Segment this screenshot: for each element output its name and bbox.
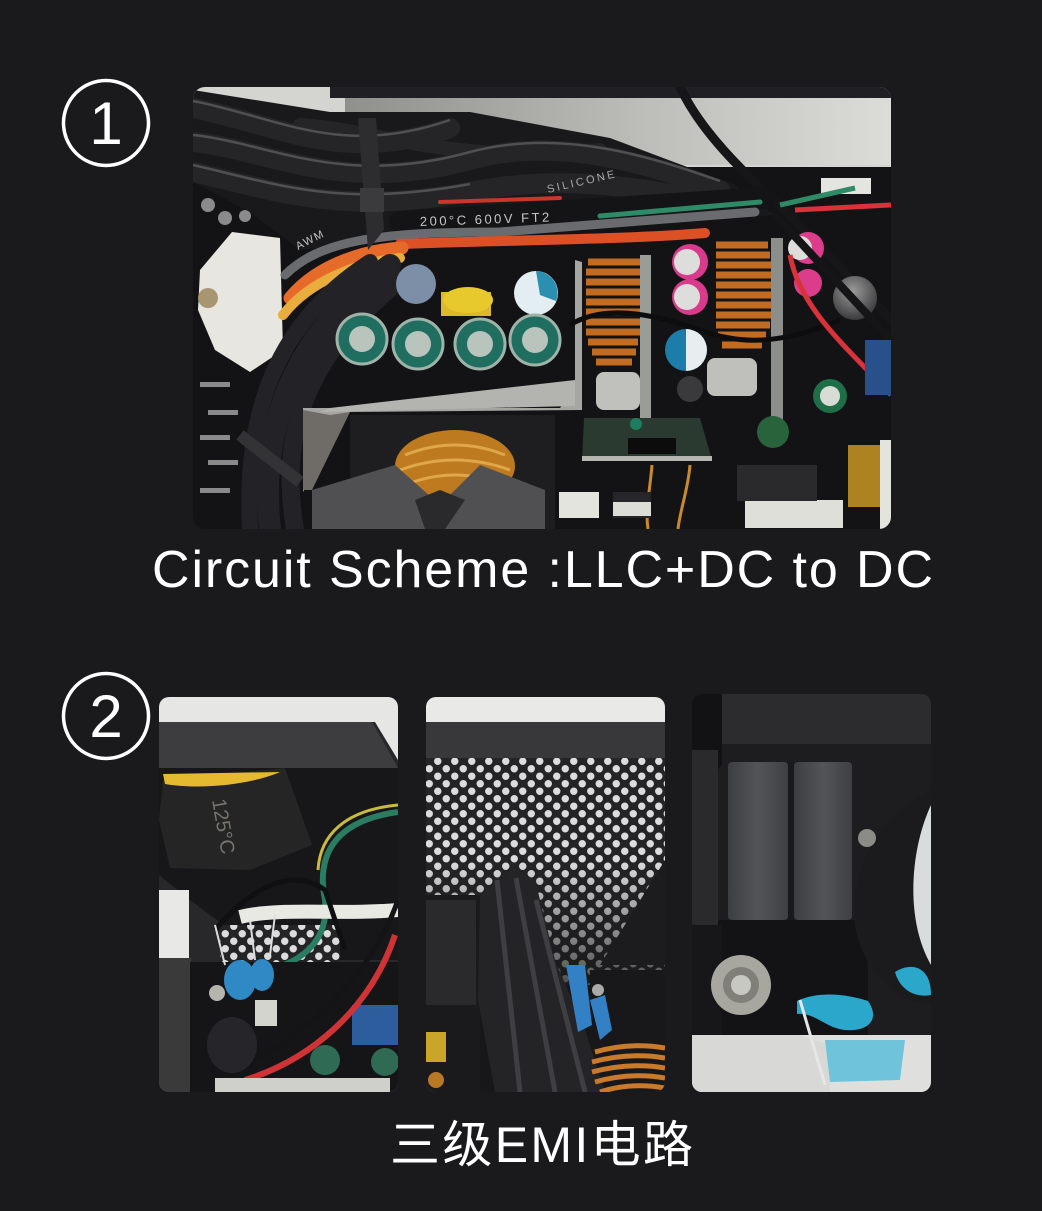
small relays (559, 465, 843, 528)
badge: number 1 (64, 80, 148, 166)
left screws (200, 198, 251, 493)
photo: power supply circuit board: SILICONE (546, 168, 618, 196)
flat ribbon wires (283, 198, 765, 315)
orange inductors (586, 245, 772, 362)
PCB risers (640, 255, 651, 425)
badge: number 1: 1 (89, 90, 123, 157)
heading: circuit scheme: Circuit Scheme :LLC+DC to DC (152, 541, 933, 599)
red wires right (790, 205, 891, 395)
control daughter card (582, 418, 711, 456)
black bundle right of connector (249, 262, 400, 529)
dark cable mass (193, 90, 687, 212)
metal bracket (303, 260, 582, 492)
badge: number 2: 2 (89, 683, 123, 750)
heading: EMI circuit: 三级EMI电路 (390, 1117, 693, 1173)
thin black wire (570, 313, 840, 340)
cable highlights (193, 101, 720, 194)
capacitors group (396, 264, 558, 316)
transformer (350, 415, 555, 529)
cable print: 200°C 600V FT2 (420, 209, 552, 229)
photo: power supply circuit board: AWM (294, 228, 327, 253)
left white connector (198, 232, 283, 372)
cable ties (358, 118, 384, 250)
photo: power supply circuit board (193, 87, 891, 529)
photo: EMI filter with choke: 125°C (207, 797, 238, 856)
photo: EMI filter with choke (159, 697, 399, 1092)
small capacitors centre (596, 232, 877, 448)
photo: ferrite cores and blue capacitors (692, 694, 931, 1092)
badge: number 2 (64, 674, 148, 758)
photo: perforated shield and heatsink (426, 697, 665, 1092)
top black cables (193, 87, 746, 211)
